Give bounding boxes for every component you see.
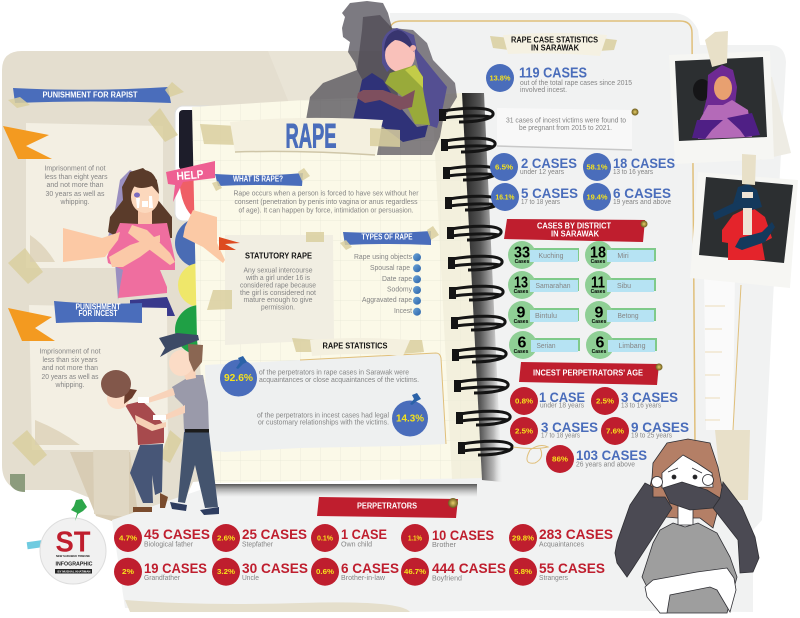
stat: 9 cases: [601, 417, 689, 445]
illustration: crying girl with HELP flag: [63, 161, 225, 316]
stat: brother: [401, 524, 494, 552]
stat: grandfather: Grandfather: [144, 575, 181, 582]
stat: brother: 10 CASES: [432, 527, 494, 543]
panel: punishment for rapist: [3, 82, 184, 284]
stat: own child: 0.1%: [317, 534, 334, 542]
punishment text: whipping.: [60, 199, 90, 206]
stat: grandfather: [114, 558, 207, 586]
stat: 119 cases: involved incest.: [520, 87, 567, 94]
description: of age). It can happen by force, intimidation or persuasion.: [238, 208, 414, 214]
stat: 14.3%: [257, 393, 428, 436]
stat: 92.6%: [220, 356, 419, 396]
stat: 5 cases: [491, 183, 578, 211]
heading: [519, 362, 662, 385]
district: Bintulu: Bintulu: [535, 313, 557, 320]
heading ribbon: [54, 301, 142, 323]
background: tan paper board: [2, 51, 420, 530]
stat: strangers: Strangers: [539, 575, 568, 582]
district: Kuching: 33: [514, 244, 530, 262]
note paper: [29, 305, 168, 450]
stat: 103 cases: 86%: [552, 454, 569, 464]
panel: punishment for incest: [8, 301, 168, 466]
stat: brother-in-law: 0.6%: [316, 567, 335, 576]
HELP flag: [166, 161, 215, 202]
description: consent (penetration by penis into vagina or anus regardless: [234, 199, 418, 206]
stat: 3 cases, 17 to 18: [510, 417, 598, 445]
stat: 2 cases: 6.5%: [495, 162, 514, 172]
illustration: policeman arresting suspect: [101, 333, 219, 515]
heading: PERPETRATORS: [357, 502, 418, 510]
district: Limbang: Limbang: [618, 343, 646, 350]
district: Samarahan: Samarahan: [536, 283, 571, 290]
stat: 14.3%: 14.3%: [396, 412, 425, 424]
stat: 9 cases: 7.6%: [606, 426, 625, 436]
stat: stepfather: 25 CASES: [242, 526, 307, 542]
list: Aggravated rape: [362, 297, 412, 304]
stat: 9 cases: 9 CASES: [631, 419, 689, 435]
stat: 3 cases, 17 to 18: 17 to 18 years: [541, 432, 580, 440]
stat: 6 cases: 6 CASES: [613, 185, 671, 201]
stat: acquaintances: Acquaintances: [539, 542, 584, 548]
panel: rape case statistics in Sarawak: [486, 33, 675, 211]
heading ribbon: [212, 168, 310, 191]
man's shadow: [306, 1, 400, 120]
logo: ST infographic badge: NEW SARAWAK TRIBUNE: [56, 554, 90, 558]
district: Serian: Cases: [514, 349, 529, 355]
stat: 92.6%: 92.6%: [224, 372, 254, 384]
white forearm: [645, 568, 736, 613]
stat: strangers: 5.8%: [514, 567, 533, 576]
stat: 1 case: under 18 years: [540, 402, 584, 410]
section: statutory rape: [207, 232, 334, 345]
illustration: victim with shadow: [306, 1, 457, 155]
stat: 6 cases: 19 years and above: [613, 199, 671, 206]
stat: 119 cases: [486, 64, 632, 94]
shirt: [642, 523, 737, 613]
stat: 3 cases, 13 to 16: 13 to 16 years: [621, 402, 661, 410]
punishment text: Imprisonment of not: [40, 348, 101, 356]
stat: 2 cases: under 12 years: [520, 169, 564, 176]
stat: own child: Own child: [341, 542, 372, 548]
note: pregnant victims: 31 cases of incest victims were found to: [506, 118, 626, 124]
stat: boyfriend: [401, 558, 506, 586]
district: Kuching: [508, 241, 579, 269]
torn paper: [205, 353, 446, 452]
district: Sibu: Sibu: [617, 283, 631, 290]
logo: ST infographic badge: ST: [56, 526, 91, 558]
punishment text: and not more than: [46, 182, 104, 189]
stat: uncle: 3.2%: [217, 567, 236, 576]
icon: orange flag: [8, 308, 55, 341]
heading ribbon: [8, 82, 184, 108]
stat: boyfriend: 46.7%: [404, 567, 427, 576]
logo: ST infographic badge: BY MUSHAL KHATIMAN: [58, 569, 90, 573]
stat: 5 cases: 16.1%: [496, 192, 515, 202]
stat: biological father: 45 CASES: [144, 526, 210, 542]
stat: 1 case: 0.8%: [515, 396, 534, 406]
heading: [504, 219, 648, 242]
punishment text: Imprisonment of not: [44, 166, 106, 172]
section: what is rape: [212, 168, 419, 214]
stat: 92.6%: of the perpetrators in rape cases in Sarawak were: [259, 370, 409, 376]
note paper: [26, 123, 163, 268]
heading ribbon: RAPE CASE STATISTICS: [511, 36, 599, 44]
note: pregnant victims: [497, 108, 638, 150]
list: Sodomy: [387, 286, 412, 294]
punishment text: less than eight years: [44, 174, 108, 181]
heading ribbon: [490, 33, 617, 56]
district: Betong: 9: [595, 304, 604, 322]
district: Limbang: [586, 331, 657, 359]
list: Incest: [394, 308, 412, 315]
stat: 119 cases: 13.8%: [490, 74, 511, 82]
section: rape statistics: [205, 338, 446, 452]
stat: 1 case: [510, 387, 585, 415]
district: Serian: Serian: [536, 343, 556, 350]
panel: cases by district: [504, 219, 657, 359]
polaroid: purple woman: [669, 31, 791, 164]
district: Samarahan: 13: [514, 274, 528, 292]
district: Betong: Betong: [618, 313, 639, 320]
stat: stepfather: [212, 524, 307, 552]
heading ribbon: TYPES OF RAPE: [362, 232, 413, 242]
punishment text: whipping.: [55, 382, 85, 389]
polaroid: woman in red: [690, 154, 798, 288]
purple shadow: [108, 170, 140, 300]
heading ribbon: [292, 338, 424, 356]
district: Sibu: Cases: [591, 289, 606, 295]
stat: boyfriend: Boyfriend: [432, 576, 462, 582]
icon: fist from right: [183, 210, 225, 263]
title banner: RAPE: [200, 118, 400, 156]
list: [354, 253, 421, 316]
colour tabs: [175, 172, 225, 355]
stat: stepfather: Stepfather: [242, 542, 274, 548]
illustration: woman with hand over her mouth: [615, 439, 759, 613]
heading: [317, 497, 458, 518]
stat: brother-in-law: Brother-in-law: [341, 575, 386, 582]
stat: grandfather: 2%: [122, 567, 135, 576]
stat: uncle: [212, 558, 308, 586]
description: the girl is considered not: [240, 290, 316, 297]
hair: [108, 168, 172, 238]
icon: crossed arms: [109, 225, 175, 267]
stat: brother-in-law: 6 CASES: [341, 560, 399, 576]
district: Miri: Miri: [617, 253, 629, 260]
heading: INCEST PERPETRATORS' AGE: [533, 368, 644, 378]
stat: boyfriend: 444 CASES: [432, 560, 506, 576]
list: Date rape: [382, 276, 412, 283]
stat: 3 cases, 13 to 16: 2.5%: [596, 396, 615, 406]
district: Bintulu: [508, 301, 579, 329]
heading ribbon: PUNISHMENT: [76, 302, 121, 312]
stat: 103 cases: 26 years and above: [576, 462, 635, 468]
face: [131, 181, 159, 213]
stat: 18 cases: 18 CASES: [613, 155, 675, 171]
stat: brother-in-law: [311, 558, 399, 586]
stat: 5 cases: 5 CASES: [521, 185, 578, 201]
stat: 2 cases: [490, 153, 577, 181]
icon: blue pin: [236, 356, 247, 369]
heading: STATUTORY RAPE: [245, 252, 313, 260]
shirt: [107, 223, 175, 298]
stat: strangers: 55 CASES: [539, 560, 605, 576]
stat: 6 cases: [583, 183, 671, 211]
district: Kuching: Kuching: [538, 253, 564, 260]
neck: [138, 208, 152, 226]
stat: 103 cases: 103 CASES: [576, 447, 647, 463]
description: Any sexual intercourse: [244, 268, 313, 274]
district: Sibu: [585, 271, 656, 299]
note: pregnant victims: be pregnant from 2015 to 2021.: [519, 125, 612, 132]
district: Bintulu: Cases: [514, 319, 529, 325]
policeman: [138, 333, 219, 515]
HELP flag: HELP: [176, 169, 204, 183]
description: [234, 190, 419, 214]
stat: 1 case: 1 CASE: [539, 389, 585, 405]
stat: acquaintances: 29.8%: [512, 534, 535, 542]
heading ribbon: FOR INCEST: [78, 309, 118, 318]
description: mature enough to give: [244, 297, 313, 304]
icon: tape: [705, 31, 728, 67]
section: types of rape: [340, 226, 439, 316]
stat: stepfather: 2.6%: [217, 534, 236, 542]
heading: IN SARAWAK: [551, 230, 599, 238]
title banner: RAPE: RAPE: [286, 118, 336, 156]
stat: grandfather: 19 CASES: [144, 560, 207, 576]
spiral binding: [439, 108, 512, 455]
hand over mouth: [663, 482, 720, 510]
icon: gold pin: [632, 108, 638, 116]
stat: biological father: [114, 524, 210, 552]
stat: biological father: Biological father: [144, 542, 194, 548]
description: [240, 268, 316, 312]
district: Miri: 18: [590, 244, 606, 262]
icon: police cap: [159, 333, 199, 357]
girl's shadow: [357, 15, 457, 155]
heading ribbon: WHAT IS RAPE?: [233, 174, 283, 184]
stat: 3 cases, 13 to 16: 3 CASES: [621, 389, 678, 405]
stat: 18 cases: [583, 153, 675, 181]
district: Kuching: Cases: [515, 259, 530, 265]
punishment text: 30 years as well as: [46, 191, 105, 198]
icon: tape: [742, 154, 756, 185]
district: Bintulu: 9: [517, 304, 526, 322]
stat: 103 cases: [513, 445, 647, 473]
stat: 119 cases: out of the total rape cases since 2015: [520, 80, 632, 87]
hair: [643, 439, 722, 528]
logo: ST infographic badge: [27, 499, 106, 584]
district: Betong: Cases: [592, 319, 607, 325]
punishment text: [44, 166, 108, 206]
stat: 18 cases: 58.1%: [586, 162, 608, 172]
district: Miri: Cases: [591, 259, 606, 265]
heading ribbon: RAPE STATISTICS: [322, 342, 388, 350]
panel: incest perpetrators' age: [510, 362, 689, 473]
icon: blue pin: [410, 393, 421, 405]
stat: 119 cases: 119 CASES: [519, 64, 587, 82]
heading ribbon: IN SARAWAK: [531, 44, 579, 52]
stat: 3 cases, 17 to 18: 2.5%: [515, 426, 534, 436]
icon: green pin: [71, 499, 87, 521]
description: Rape occurs when a person is forced to have sex without her: [234, 190, 419, 198]
description: permission.: [261, 304, 295, 312]
icon: orange flag: [3, 126, 52, 159]
punishment text: and not more than: [42, 365, 98, 372]
district: Samarahan: [508, 271, 579, 299]
stat: 2 cases: 2 CASES: [521, 155, 577, 171]
district: Serian: 6: [518, 334, 527, 352]
neck: [678, 505, 693, 525]
stat: 3 cases, 17 to 18: 3 CASES: [541, 419, 598, 435]
stat: brother: 1.1%: [408, 534, 423, 542]
stat: biological father: 4.7%: [119, 534, 138, 542]
stat: 6 cases: 19.4%: [586, 192, 608, 202]
heading: CASES BY DISTRICT: [537, 222, 611, 230]
arms: [615, 483, 672, 577]
icon: red flag: [219, 237, 240, 250]
list: Rape using objects: [354, 254, 412, 261]
stat: acquaintances: 283 CASES: [539, 526, 613, 542]
punishment text: 20 years as well as: [42, 374, 99, 381]
stat: own child: 1 CASE: [341, 526, 387, 542]
stat: uncle: 30 CASES: [242, 560, 308, 576]
stat: 5 cases: 17 to 18 years: [521, 199, 560, 206]
district: Miri: [585, 241, 656, 269]
stat: 92.6%: acquaintances or close acquaintances of the victims.: [259, 377, 419, 384]
stat: 18 cases: 13 to 16 years: [613, 169, 653, 176]
stat: 9 cases: 19 to 25 years: [631, 432, 672, 440]
district: Betong: [585, 301, 656, 329]
stat: acquaintances: [509, 524, 613, 552]
description: with a girl under 16 is: [245, 275, 310, 282]
logo: ST infographic badge: INFOGRAPHIC: [56, 562, 93, 568]
stat: own child: [311, 524, 387, 552]
district: Sibu: 11: [591, 274, 605, 292]
district: Limbang: 6: [596, 334, 605, 352]
face: [662, 455, 713, 488]
punishment text: [40, 348, 101, 389]
punishment text: less than six years: [42, 357, 98, 364]
district: Limbang: Cases: [592, 349, 607, 355]
stat: 14.3%: or customary relationships with the victims.: [258, 420, 389, 426]
stat: brother: Brother: [432, 542, 457, 549]
stat: uncle: Uncle: [242, 575, 259, 582]
district: Samarahan: Cases: [514, 289, 529, 295]
stat: strangers: [509, 558, 605, 586]
stat: 3 cases, 13 to 16: [591, 387, 678, 415]
heading ribbon: PUNISHMENT FOR RAPIST: [42, 90, 138, 100]
list: Spousal rape: [370, 265, 410, 272]
icon: hand from left: [63, 228, 120, 262]
district: Serian: [509, 331, 580, 359]
description: considered rape because: [240, 282, 316, 290]
notebook: [175, 93, 502, 497]
suspect: [101, 370, 168, 512]
stat: 14.3%: of the perpetrators in incest cases had legal: [257, 412, 389, 420]
panel: perpetrators: [114, 497, 613, 586]
